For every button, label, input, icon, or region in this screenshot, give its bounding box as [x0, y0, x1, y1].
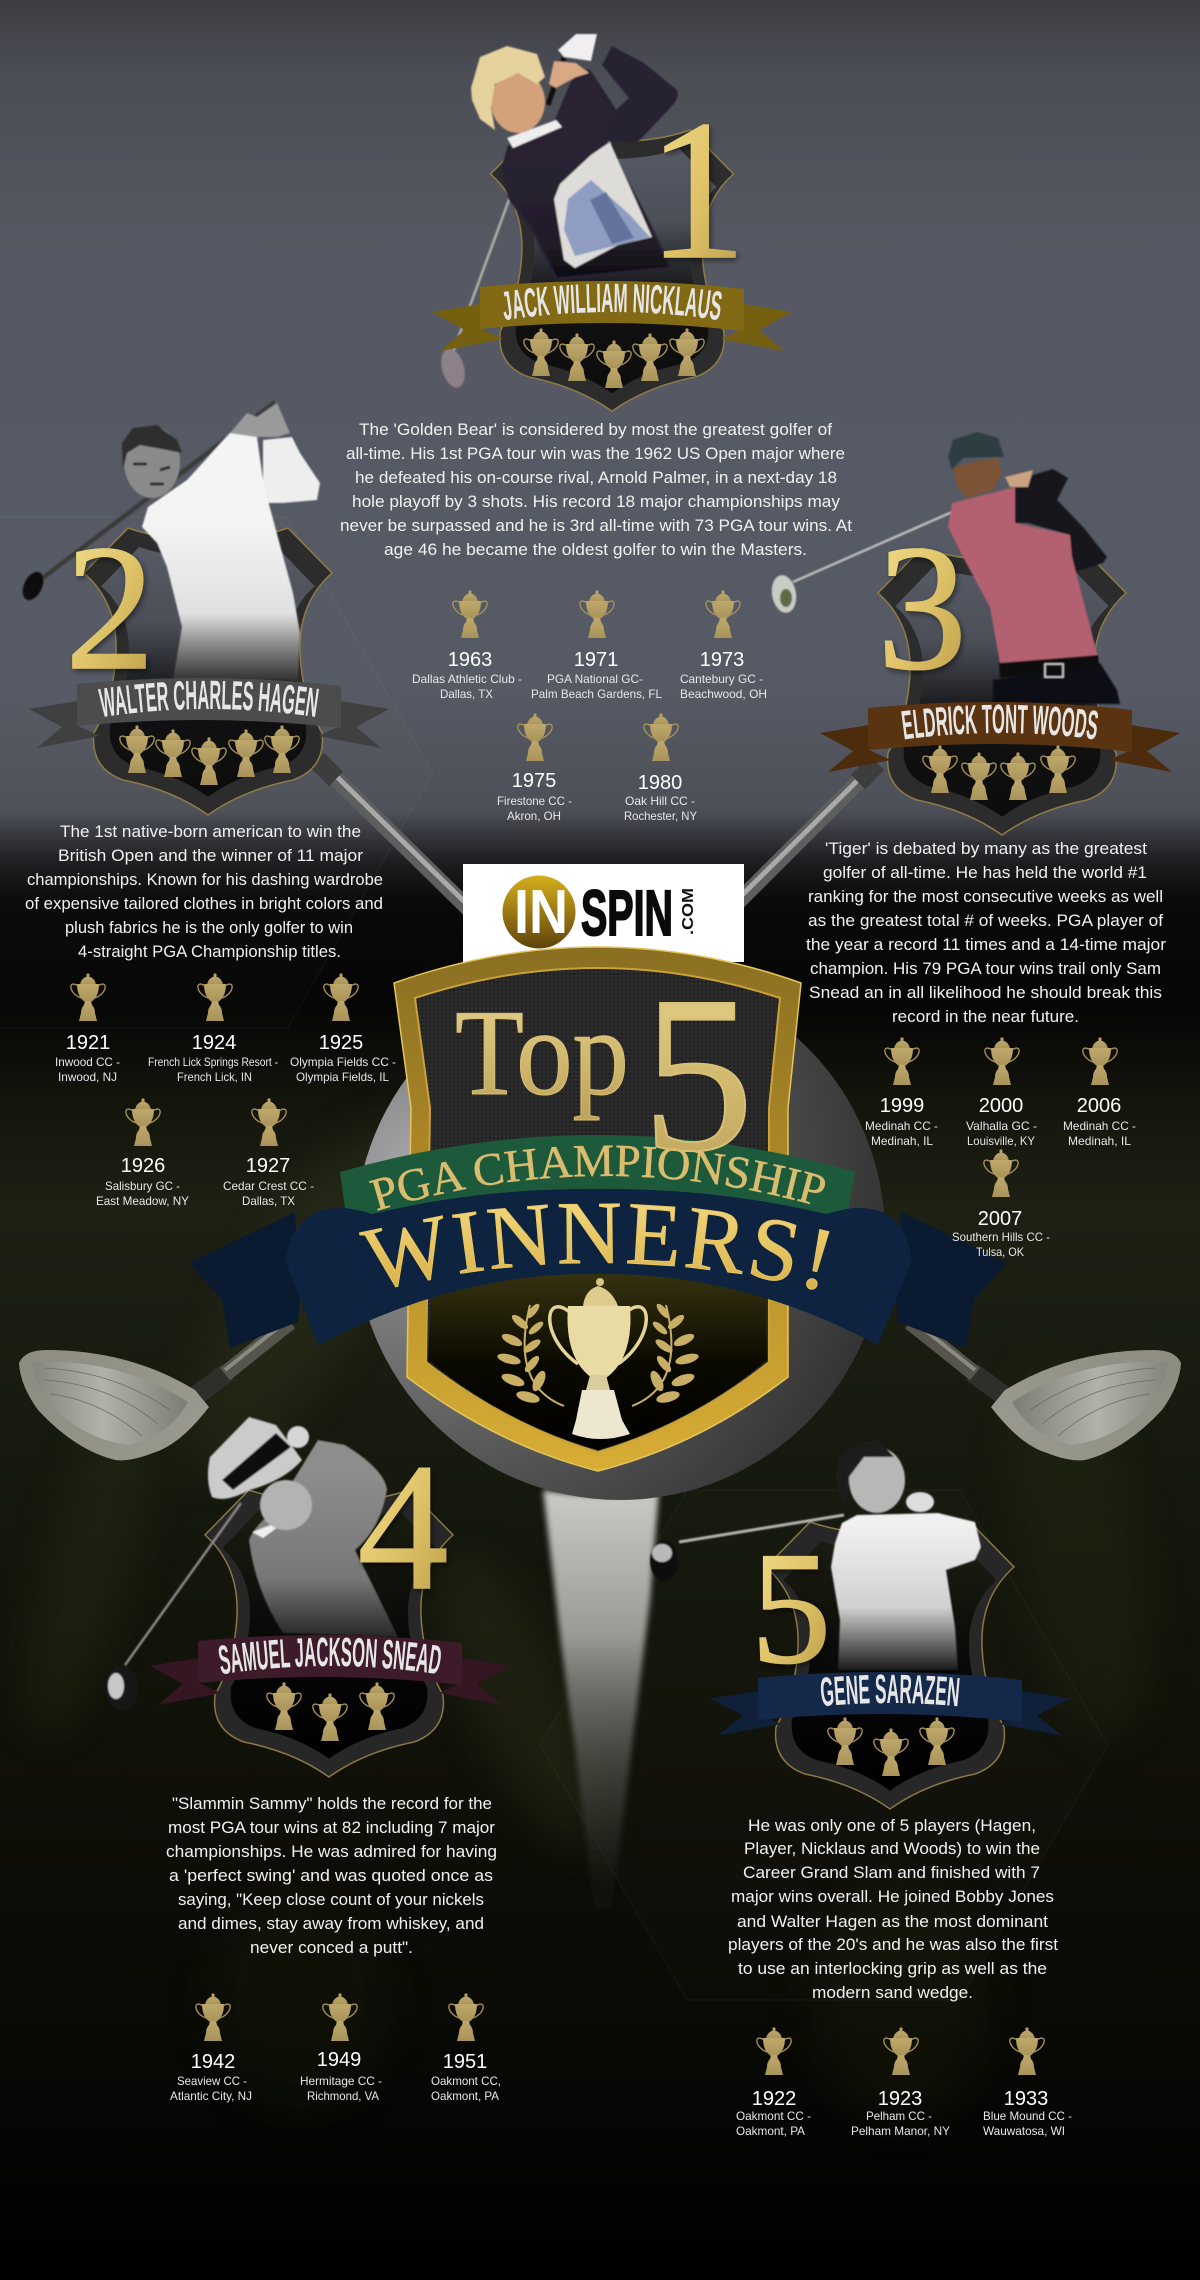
ribbon: Gene Sarazen	[710, 1672, 1070, 1736]
bio text: age 46 he became the oldest golfer to win the Masters.	[384, 540, 807, 559]
ribbon: Jack William Nicklaus: JACK WILLIAM NICKLAUS	[504, 284, 722, 320]
win 1973: Cantebury GC -	[680, 672, 763, 686]
win 1999: Medinah, IL	[871, 1134, 933, 1148]
number 4: 4	[358, 1427, 448, 1628]
icon: right driver head	[910, 1318, 1181, 1460]
win 2007: Southern Hills CC -	[952, 1230, 1050, 1244]
bio text	[728, 1816, 1058, 2002]
photo: Gene Sarazen	[650, 1440, 981, 1670]
win 2000: Louisville, KY	[967, 1134, 1035, 1148]
win 2007	[952, 1149, 1050, 1259]
win 1942: Seaview CC -	[177, 2074, 247, 2088]
win 1923	[851, 2027, 950, 2138]
win 1921	[55, 973, 120, 1084]
win 1949	[300, 1993, 382, 2103]
bio text: most PGA tour wins at 82 including 7 major	[168, 1818, 495, 1837]
win 1963: 1963	[448, 649, 492, 671]
win 1925	[290, 973, 396, 1084]
win 1951: 1951	[443, 2051, 487, 2073]
win 1951: Oakmont, PA	[431, 2089, 499, 2103]
win 2006: Medinah, IL	[1068, 1134, 1131, 1148]
ribbon: Eldrick Tont Woods	[820, 702, 1180, 772]
trophies row	[267, 1682, 394, 1741]
win 1923: Pelham Manor, NY	[851, 2124, 950, 2138]
panel: central logo and badge	[189, 864, 1007, 1472]
title: 5: 5	[642, 951, 754, 1198]
bio text: never be surpassed and he is 3rd all-time with 73 PGA tour wins. At	[340, 516, 852, 535]
win 1922	[736, 2027, 811, 2138]
win 1926	[96, 1098, 189, 1208]
bio text: Snead an in all likelihood he should break this	[809, 983, 1162, 1002]
bio text	[25, 822, 383, 961]
bio text: players of the 20's and he was also the first	[728, 1935, 1058, 1954]
win 1942: Atlantic City, NJ	[170, 2089, 252, 2103]
win 2007: 2007	[978, 1208, 1022, 1230]
win 1999	[865, 1037, 938, 1148]
panel: player 4 Snead	[106, 1416, 510, 2103]
win 2006	[1063, 1037, 1136, 1148]
bio text: modern sand wedge.	[812, 1983, 973, 2002]
ribbon: Eldrick Tont Woods: ELDRICK TONT WOODS	[901, 704, 1098, 740]
bio text: champion. His 79 PGA tour wins trail only Sam	[810, 959, 1161, 978]
win 1973	[680, 590, 767, 701]
win 1923: 1923	[878, 2088, 922, 2110]
bio text: Career Grand Slam and finished with 7	[743, 1863, 1040, 1882]
bio text: He was only one of 5 players (Hagen,	[748, 1816, 1036, 1835]
win 1963: Dallas Athletic Club -	[412, 672, 522, 686]
win 1925: Olympia Fields, IL	[296, 1070, 389, 1084]
bio text: plush fabrics he is the only golfer to win	[65, 918, 353, 937]
win 1923: Pelham CC -	[866, 2109, 932, 2123]
panel: player 2 Hagen	[22, 400, 396, 1208]
grass streaks	[5, 1097, 1172, 2120]
win 1926: Salisbury GC -	[105, 1179, 180, 1193]
win 1924: French Lick Springs Resort -	[148, 1055, 278, 1069]
win 2006: Medinah CC -	[1063, 1119, 1136, 1133]
photo: Walter Hagen	[19, 402, 320, 680]
win 1925: Olympia Fields CC -	[290, 1055, 396, 1069]
win 1980: Oak Hill CC -	[625, 794, 695, 808]
bio text: 4-straight PGA Championship titles.	[78, 942, 341, 961]
win 1942	[170, 1993, 252, 2103]
win 1971: Palm Beach Gardens, FL	[531, 687, 662, 701]
bio text: Player, Nicklaus and Woods) to win the	[744, 1839, 1040, 1858]
win 1949: Hermitage CC -	[300, 2074, 382, 2088]
win 1933: Wauwatosa, WI	[983, 2124, 1065, 2138]
win 1975: 1975	[512, 770, 556, 792]
win 2000: 2000	[979, 1095, 1023, 1117]
bio text: and Walter Hagen as the most dominant	[737, 1912, 1048, 1931]
wins list 1	[412, 590, 767, 823]
win 1922: Oakmont, PA	[736, 2124, 805, 2138]
win 1963: Dallas, TX	[440, 687, 493, 701]
win 2007: Tulsa, OK	[976, 1245, 1024, 1259]
win 1942: 1942	[191, 2051, 235, 2073]
bio text: all-time. His 1st PGA tour win was the 1962 US Open major where	[346, 444, 845, 463]
ribbon: Walter Charles Hagen: WALTER CHARLES HAGEN	[98, 680, 319, 717]
win 1921: Inwood CC -	[55, 1055, 120, 1069]
bio text: ranking for the most consecutive weeks as well	[808, 887, 1163, 906]
win 1926: 1926	[121, 1155, 165, 1177]
heading: Winners: WINNERS!	[358, 1203, 830, 1290]
win 1963	[412, 590, 522, 701]
bio text: a 'perfect swing' and was quoted once as	[169, 1866, 493, 1885]
bio text: British Open and the winner of 11 major	[58, 846, 363, 865]
golf ball	[355, 970, 885, 1500]
win 1973: 1973	[700, 649, 744, 671]
win 1975: Akron, OH	[507, 809, 561, 823]
number 1: 1	[647, 80, 747, 301]
win 1925: 1925	[319, 1032, 363, 1054]
logo: inspin.com	[463, 864, 744, 962]
number 5: 5	[751, 1519, 831, 1697]
bio text: as the greatest total # of weeks. PGA player of	[808, 911, 1163, 930]
bio text: never conced a putt".	[250, 1938, 413, 1957]
logo: inspin.com: SPIN	[581, 877, 673, 949]
wins list 2	[55, 973, 396, 1208]
shield 3	[878, 548, 1126, 835]
ribbon: Jack William Nicklaus	[432, 281, 792, 351]
panel: player 5 Sarazen	[649, 1440, 1072, 2138]
title: Top: Top	[455, 984, 629, 1121]
win 1921: 1921	[66, 1032, 110, 1054]
bio text: hole playoff by 3 shots. His record 18 major championships may	[352, 492, 840, 511]
shield 4	[205, 1490, 453, 1777]
bio text: of expensive tailored clothes in bright colors and	[25, 894, 383, 913]
bio text: major wins overall. He joined Bobby Jones	[731, 1887, 1054, 1906]
ribbon: PGA Championship	[340, 1135, 855, 1260]
win 1927: 1927	[246, 1155, 290, 1177]
bio text: "Slammin Sammy" holds the record for the	[172, 1794, 492, 1813]
win 1933: Blue Mound CC -	[983, 2109, 1072, 2123]
main shield	[394, 947, 801, 1471]
win 1975: Firestone CC -	[497, 794, 572, 808]
bio text: saying, "Keep close count of your nickels	[178, 1890, 484, 1909]
bio text: championships. Known for his dashing wardrobe	[27, 870, 383, 889]
win 1933	[983, 2027, 1072, 2138]
win 1951	[431, 1993, 501, 2103]
win 1951: Oakmont CC,	[431, 2074, 501, 2088]
win 1927	[223, 1098, 314, 1208]
win 1971	[531, 590, 662, 701]
shield 1	[490, 130, 734, 411]
win 1971: 1971	[574, 649, 618, 671]
win 1921: Inwood, NJ	[58, 1070, 117, 1084]
trophies row	[923, 745, 1075, 800]
ribbon: Samuel Jackson Snead	[150, 1635, 510, 1705]
win 1927: Cedar Crest CC -	[223, 1179, 314, 1193]
number 2: 2	[65, 508, 155, 707]
wins list 3	[865, 1037, 1136, 1259]
number 3: 3	[877, 508, 967, 707]
wins list 4	[170, 1993, 501, 2103]
bio text	[166, 1794, 497, 1957]
banner: Winners	[189, 1189, 1007, 1348]
panel: player 1 Nicklaus	[301, 33, 892, 823]
ribbon: Gene Sarazen: GENE SARAZEN	[820, 1674, 960, 1706]
win 1924: French Lick, IN	[177, 1070, 252, 1084]
bio text: he defeated his on-course rival, Arnold Palmer, in a next-day 18	[355, 468, 837, 487]
win 1975	[497, 713, 572, 823]
trophies row	[524, 328, 704, 388]
shield 2	[84, 528, 332, 815]
win 1922: Oakmont CC -	[736, 2109, 811, 2123]
win 1999: 1999	[880, 1095, 924, 1117]
logo: inspin.com: .COM	[680, 888, 697, 935]
shield 5	[766, 1522, 1014, 1809]
win 1999: Medinah CC -	[865, 1119, 938, 1133]
win 2000	[966, 1037, 1037, 1148]
bio text: The 'Golden Bear' is considered by most the greatest golfer of	[359, 420, 832, 439]
tee	[543, 1490, 659, 1980]
photo: Jack Nicklaus	[437, 34, 678, 390]
bio text: golfer of all-time. He has held the world #1	[823, 863, 1147, 882]
trophies row	[828, 1717, 954, 1776]
bio text: the year a record 11 times and a 14-time major	[806, 935, 1166, 954]
win 1973: Beachwood, OH	[680, 687, 767, 701]
logo: inspin.com: IN	[514, 878, 568, 947]
photo: Tiger Woods	[769, 432, 1120, 704]
icon: laurels and trophy	[496, 1278, 700, 1439]
win 1924	[148, 973, 278, 1084]
bio text	[340, 420, 852, 559]
win 1980	[624, 713, 697, 823]
ribbon: Walter Charles Hagen	[29, 678, 389, 748]
win 2000: Valhalla GC -	[966, 1119, 1037, 1133]
win 2006: 2006	[1077, 1095, 1121, 1117]
photo: Sam Snead	[105, 1417, 398, 1710]
hexagon panels	[0, 517, 1108, 2000]
win 1949: 1949	[317, 2049, 361, 2071]
bio text: championships. He was admired for having	[166, 1842, 497, 1861]
ribbon: Samuel Jackson Snead: SAMUEL JACKSON SNEAD	[218, 1637, 441, 1674]
trophies row	[120, 725, 299, 785]
wins list 5	[736, 2027, 1072, 2138]
win 1933: 1933	[1004, 2088, 1048, 2110]
panel: player 3 Woods	[770, 432, 1180, 1259]
bio text: to use an interlocking grip as well as the	[738, 1959, 1047, 1978]
bio text: and dimes, stay away from whiskey, and	[178, 1914, 484, 1933]
crossed club shafts	[317, 760, 877, 920]
win 1980: 1980	[638, 772, 682, 794]
win 1926: East Meadow, NY	[96, 1194, 189, 1208]
bio text: 'Tiger' is debated by many as the greatest	[825, 839, 1147, 858]
bio text: record in the near future.	[892, 1007, 1079, 1026]
icon: left driver head	[19, 1318, 290, 1460]
bio text: The 1st native-born american to win the	[60, 822, 361, 841]
win 1922: 1922	[752, 2088, 796, 2110]
win 1924: 1924	[192, 1032, 236, 1054]
win 1980: Rochester, NY	[624, 809, 697, 823]
heading: PGA Championship: PGA CHAMPIONSHIP	[368, 1145, 826, 1211]
bio text	[806, 839, 1166, 1026]
win 1927: Dallas, TX	[242, 1194, 295, 1208]
win 1971: PGA National GC-	[547, 672, 643, 686]
win 1949: Richmond, VA	[307, 2089, 379, 2103]
